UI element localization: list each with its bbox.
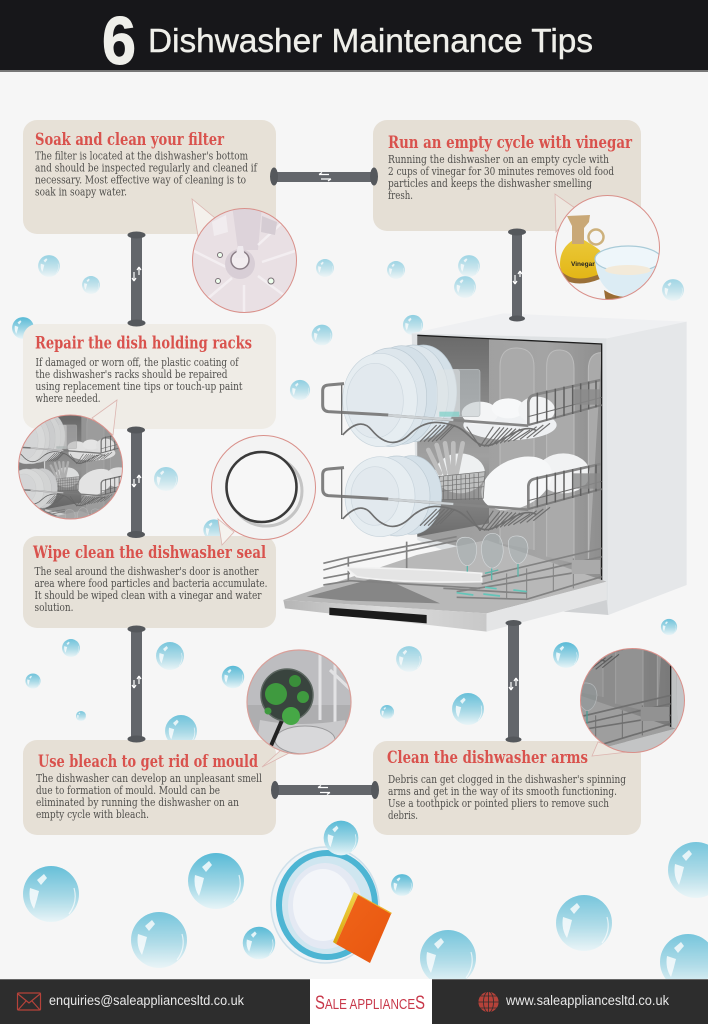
body text: empty cycle with bleach.: [36, 808, 149, 821]
heading: Clean the dishwasher arms: [387, 748, 588, 768]
title text: Dishwasher Maintenance Tips: [148, 22, 593, 59]
body text: eliminated by running the dishwasher on an: [36, 796, 239, 809]
logo: [310, 979, 432, 1024]
callout: vinegar and bowl: [555, 194, 662, 305]
connector: seal to mould: [128, 626, 146, 742]
body text: due to formation of mould. Mould can be: [36, 784, 220, 797]
panel: soak and clean your filter: [23, 120, 276, 234]
dishwasher illustration: [283, 313, 687, 632]
body text: The filter is located at the dishwasher's bottom: [35, 150, 248, 162]
icon: vinegar jug: Vinegar: [571, 261, 595, 268]
body text: fresh.: [388, 189, 413, 202]
body text: The dishwasher can develop an unpleasant smell: [36, 772, 262, 785]
panel: wipe clean the dishwasher seal: [23, 536, 276, 628]
callout: door seal: [212, 436, 316, 545]
body text: Running the dishwasher on an empty cycle with: [388, 153, 609, 166]
body text: [36, 772, 262, 821]
icon: envelope: [18, 993, 40, 1010]
plate and sponge illustration: [271, 847, 392, 963]
bubbles around plate: [243, 821, 413, 959]
title numeral: 6: [102, 3, 136, 79]
website address: www.saleappliancesltd.co.uk: [505, 993, 669, 1008]
body text: soak in soapy water.: [35, 186, 127, 198]
logo: SALE APPLIANCES: [315, 993, 425, 1014]
body text: [34, 565, 268, 614]
body text: and should be inspected regularly and cleaned if: [35, 162, 258, 174]
footer bar: [0, 979, 708, 1024]
body text: solution.: [34, 601, 74, 614]
heading: Soak and clean your filter: [35, 130, 225, 150]
heading: Run an empty cycle with vinegar: [388, 133, 633, 153]
body text: [388, 153, 614, 202]
icon: sponge: [333, 892, 392, 963]
body text: the dishwasher's racks should be repaired: [36, 368, 228, 381]
body text: [36, 356, 243, 405]
body text: using replacement tine tips or touch-up paint: [36, 380, 243, 393]
callout: mould close-up: [247, 650, 351, 767]
decorative soap bubbles: [12, 255, 708, 990]
body text: particles and keeps the dishwasher smelling: [388, 177, 592, 190]
panel: repair the dish holding racks: [23, 324, 276, 429]
callout: racks close-up: [18, 399, 123, 520]
body text: debris.: [388, 809, 418, 822]
panel: use bleach to get rid of mould: [23, 740, 276, 835]
body text: 2 cups of vinegar for 30 minutes removes old food: [388, 165, 614, 178]
connector: filter to vinegar: [270, 168, 378, 186]
body text: [35, 150, 258, 198]
body text: where needed.: [36, 392, 100, 405]
body text: Debris can get clogged in the dishwasher's spinning: [388, 773, 626, 786]
icon: bowl: [594, 245, 659, 299]
heading: Use bleach to get rid of mould: [38, 752, 258, 772]
body text: Use a toothpick or pointed pliers to remove such: [388, 797, 609, 810]
icon: globe: [478, 992, 499, 1012]
connector: dishwasher to arms: [506, 620, 522, 742]
icon: magnified mould: [261, 669, 313, 725]
callout: arms close-up: [580, 648, 685, 756]
heading: Repair the dish holding racks: [35, 334, 252, 354]
connector: filter to racks: [128, 232, 146, 326]
panel: run an empty cycle with vinegar: [373, 120, 641, 231]
body text: necessary. Most effective way of cleaning is to: [35, 174, 246, 186]
body text: The seal around the dishwasher's door is another: [34, 565, 259, 578]
header bar: [0, 0, 708, 79]
body text: If damaged or worn off, the plastic coating of: [36, 356, 239, 369]
callout: filter photo: [192, 199, 298, 315]
body text: arms and get in the way of its smooth functioning.: [388, 785, 617, 798]
connector: racks to seal: [127, 426, 145, 538]
connector: vinegar to dishwasher: [508, 228, 526, 322]
connector: mould to arms: [271, 781, 379, 799]
panel: clean the dishwasher arms: [373, 741, 641, 835]
heading: Wipe clean the dishwasher seal: [32, 543, 266, 563]
body text: [388, 773, 626, 822]
body text: It should be wiped clean with a vinegar and water: [34, 589, 262, 602]
body text: area where food particles and bacteria accumulate.: [34, 577, 268, 590]
email address: enquiries@saleappliancesltd.co.uk: [49, 993, 244, 1008]
